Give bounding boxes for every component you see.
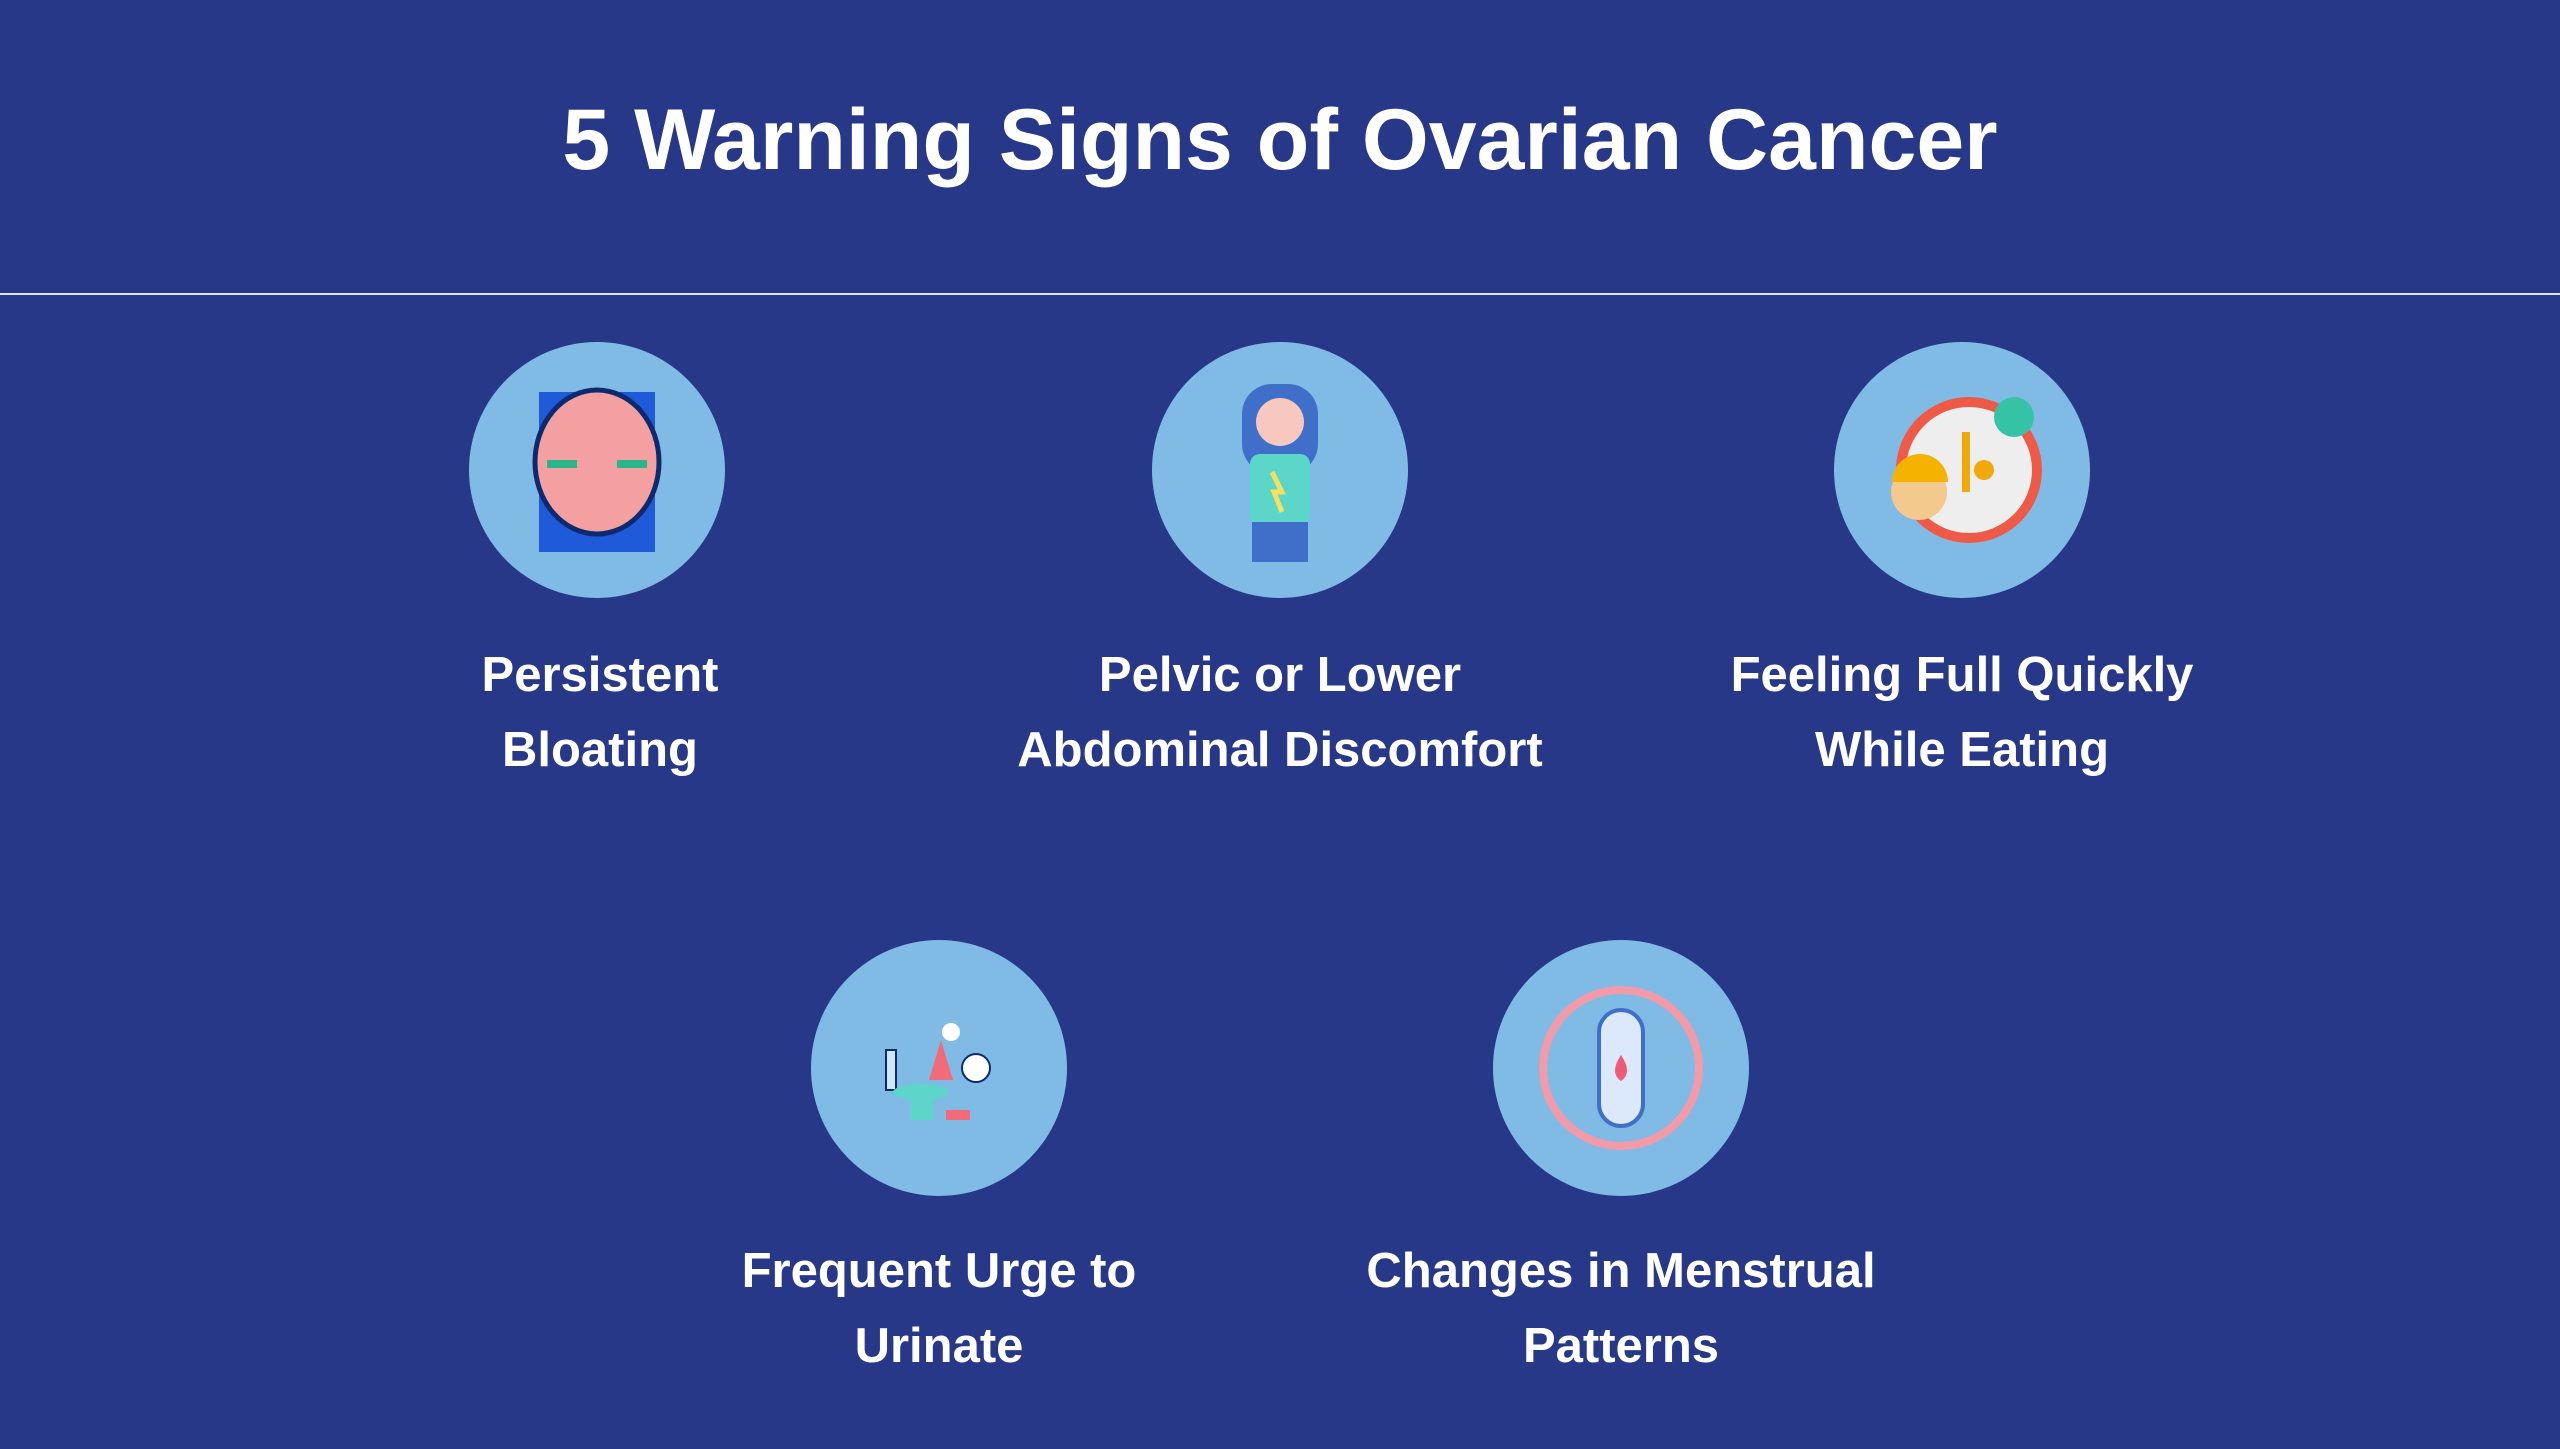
- label: Patterns: [1523, 1319, 1719, 1373]
- panel: menstrual: [1366, 940, 1876, 1373]
- panel: urinate: [742, 940, 1136, 1373]
- label: While Eating: [1815, 723, 2109, 777]
- label: [742, 1244, 1136, 1373]
- label: Urinate: [855, 1319, 1023, 1373]
- label: [1017, 648, 1543, 777]
- label: Bloating: [502, 723, 698, 777]
- title: 5 Warning Signs of Ovarian Cancer: [562, 92, 1998, 188]
- label: Abdominal Discomfort: [1017, 723, 1543, 777]
- label: Changes in Menstrual: [1366, 1244, 1876, 1298]
- label: [1366, 1244, 1876, 1373]
- icon: pad cycle: [1493, 940, 1749, 1196]
- icon: bloated belly: [469, 342, 725, 598]
- icon: toilet: [811, 940, 1067, 1196]
- label: [482, 648, 718, 777]
- label: Persistent: [482, 648, 718, 702]
- label: Pelvic or Lower: [1099, 648, 1461, 702]
- panel: bloating: [469, 342, 725, 777]
- icon: clock and fork: [1834, 342, 2090, 598]
- icon: woman in pain: [1152, 342, 1408, 598]
- label: Feeling Full Quickly: [1731, 648, 2193, 702]
- label: Frequent Urge to: [742, 1244, 1136, 1298]
- panel: full quickly: [1731, 342, 2194, 777]
- label: [1731, 648, 2194, 777]
- panel: pelvic: [1017, 342, 1543, 777]
